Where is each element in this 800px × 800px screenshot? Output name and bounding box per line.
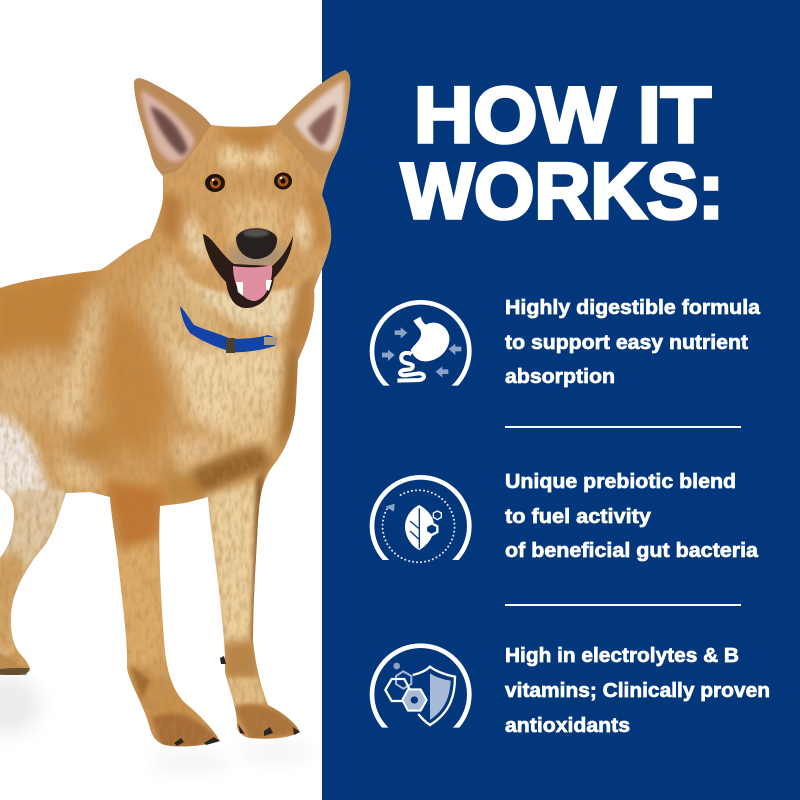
dog photo illustration — [0, 70, 350, 746]
shield half — [430, 673, 451, 720]
dog chest details — [172, 436, 232, 473]
dog right ear — [276, 70, 350, 178]
text: digestible formula: absorption — [505, 366, 615, 388]
title: HOW IT — [414, 70, 711, 159]
dog neck and ruff — [150, 250, 230, 345]
shield outline — [413, 667, 455, 725]
icon ring — [372, 477, 469, 575]
text: digestible formula — [505, 297, 761, 388]
leaf veins — [410, 508, 419, 548]
dot — [393, 663, 400, 669]
dog collar — [180, 306, 277, 353]
dog claws — [0, 656, 300, 746]
icon ring — [372, 302, 469, 400]
dog hind leg — [0, 490, 68, 660]
text: prebiotic blend: Unique prebiotic blend — [505, 471, 736, 493]
text: prebiotic blend: of beneficial gut bacteria — [505, 540, 759, 562]
dog head — [160, 125, 331, 294]
text: digestible formula: Highly digestible formula — [505, 297, 761, 319]
dog mouth and tongue — [203, 234, 293, 308]
floor shadows — [0, 675, 310, 772]
text: electrolytes: High in electrolytes & B — [505, 645, 739, 667]
hexagons — [433, 511, 441, 520]
fur texture — [0, 84, 331, 746]
title: WORKS: — [401, 146, 724, 235]
intestine — [397, 353, 424, 381]
hexagon left — [385, 679, 410, 701]
dotted circle — [383, 490, 455, 562]
dog front leg left — [105, 480, 165, 565]
leaf shape — [405, 505, 434, 550]
forehead and cheeks — [218, 145, 252, 169]
dog front leg right — [205, 480, 262, 660]
arrows — [382, 327, 461, 378]
icon: stomach — [372, 302, 469, 400]
title — [401, 70, 724, 235]
navy panel — [322, 0, 800, 800]
icon: shield — [372, 646, 469, 743]
text: electrolytes: antioxidants — [505, 715, 630, 737]
icon: leaf — [372, 477, 469, 575]
icon ring — [372, 646, 469, 743]
dog eyes — [205, 172, 292, 192]
text: electrolytes: vitamins; Clinically proven — [505, 680, 770, 702]
triangle — [385, 504, 395, 512]
stomach — [411, 317, 449, 361]
dog nose — [236, 228, 277, 259]
hexagon top — [396, 671, 411, 689]
dog pale belly — [0, 415, 55, 500]
text: electrolytes — [505, 645, 770, 737]
text: prebiotic blend: to fuel activity — [505, 506, 652, 528]
text: digestible formula: to support easy nutrient — [505, 332, 748, 354]
dog left ear — [134, 78, 211, 176]
dog body silhouette — [0, 70, 350, 746]
text: prebiotic blend — [505, 471, 759, 562]
hexagon nut — [402, 689, 427, 711]
